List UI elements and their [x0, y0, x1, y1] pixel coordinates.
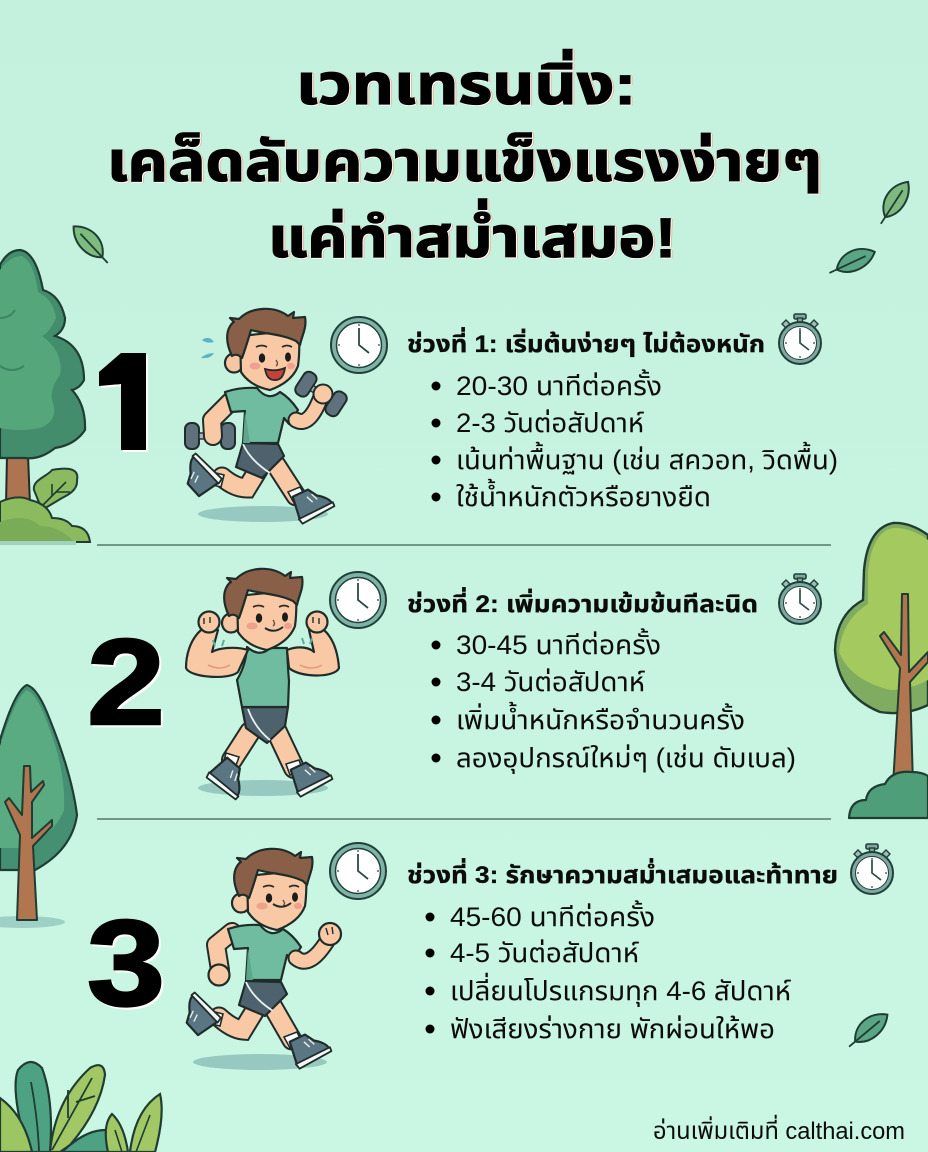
tree: right — [835, 523, 928, 785]
icon: wall clock 3 — [330, 843, 386, 899]
list: phase 1: เน้นท่าพื้นฐาน (เช่น สควอท, วิดพื้น) — [456, 441, 838, 475]
list: phase 3: 4-5 วันต่อสัปดาห์ — [450, 938, 640, 968]
footer source: อ่านเพิ่มเติมที่ calthai.com — [653, 1114, 905, 1145]
list: phase 2: 3-4 วันต่อสัปดาห์ — [456, 667, 646, 697]
icon: wall clock 2 — [330, 572, 386, 628]
heading: phase 1: ช่วงที่ 1: เริ่มต้นง่ายๆ ไม่ต้องหนัก — [407, 327, 765, 358]
bush: right — [849, 772, 928, 818]
plant: bottom left — [0, 1062, 162, 1152]
icon: wall clock 1 — [331, 317, 387, 373]
icon: leaf top left — [67, 219, 115, 269]
list: phase 3: 45-60 นาทีต่อครั้ง — [450, 900, 655, 932]
list: phase 2: เพิ่มน้ำหนักหรือจำนวนครั้ง — [456, 701, 745, 735]
tree: top left — [0, 250, 85, 505]
title — [107, 48, 822, 269]
list: phase 1: 20-30 นาทีต่อครั้ง — [456, 369, 662, 401]
runner 3 — [177, 849, 341, 1070]
icon: leaf right — [825, 242, 879, 281]
title: เคล็ดลับความแข็งแรงง่ายๆ — [107, 130, 822, 193]
list: phase 2 — [432, 628, 796, 774]
icon: stopwatch 1 — [779, 314, 821, 364]
list: phase 1: 2-3 วันต่อสัปดาห์ — [456, 408, 645, 438]
runner 1 with dumbbells — [178, 309, 349, 524]
heading: phase 3: ช่วงที่ 3: รักษาความสม่ำเสมอและท้าทาย — [407, 858, 838, 889]
icon: leaf top right — [872, 176, 916, 229]
number 2: 2 — [87, 614, 165, 750]
runner 2 flexing — [186, 569, 339, 806]
list: phase 2: 30-45 นาทีต่อครั้ง — [456, 628, 661, 660]
list: phase 3: เปลี่ยนโปรแกรมทุก 4-6 สัปดาห์ — [450, 972, 792, 1007]
panel: section 1 — [84, 309, 838, 524]
icon: leaf lower right — [842, 1007, 893, 1054]
number 1 — [99, 353, 148, 452]
number 1: 1 — [84, 332, 160, 478]
heading: phase 2: ช่วงที่ 2: เพิ่มความเข้มข้นทีละนิด — [407, 587, 758, 618]
panel: section 3 — [87, 843, 893, 1070]
number 3: 3 — [87, 895, 165, 1031]
list: phase 3 — [426, 900, 792, 1044]
title: เวทเทรนนิ่ง: — [296, 48, 636, 116]
title: แค่ทำสม่ำเสมอ! — [268, 198, 676, 269]
panel: section 2 — [87, 569, 821, 806]
list: phase 2: ลองอุปกรณ์ใหม่ๆ (เช่น ดัมเบล) — [456, 743, 796, 774]
icon: stopwatch 3 — [851, 844, 893, 894]
dividers — [97, 545, 831, 819]
list: phase 1: ใช้น้ำหนักตัวหรือยางยืด — [456, 478, 711, 512]
list: phase 3: ฟังเสียงร่างกาย พักผ่อนให้พอ — [450, 1014, 775, 1044]
tree: left middle — [0, 685, 77, 928]
list: phase 1 — [432, 369, 838, 512]
icon: stopwatch 2 — [779, 574, 821, 624]
bush: top left — [0, 469, 90, 545]
